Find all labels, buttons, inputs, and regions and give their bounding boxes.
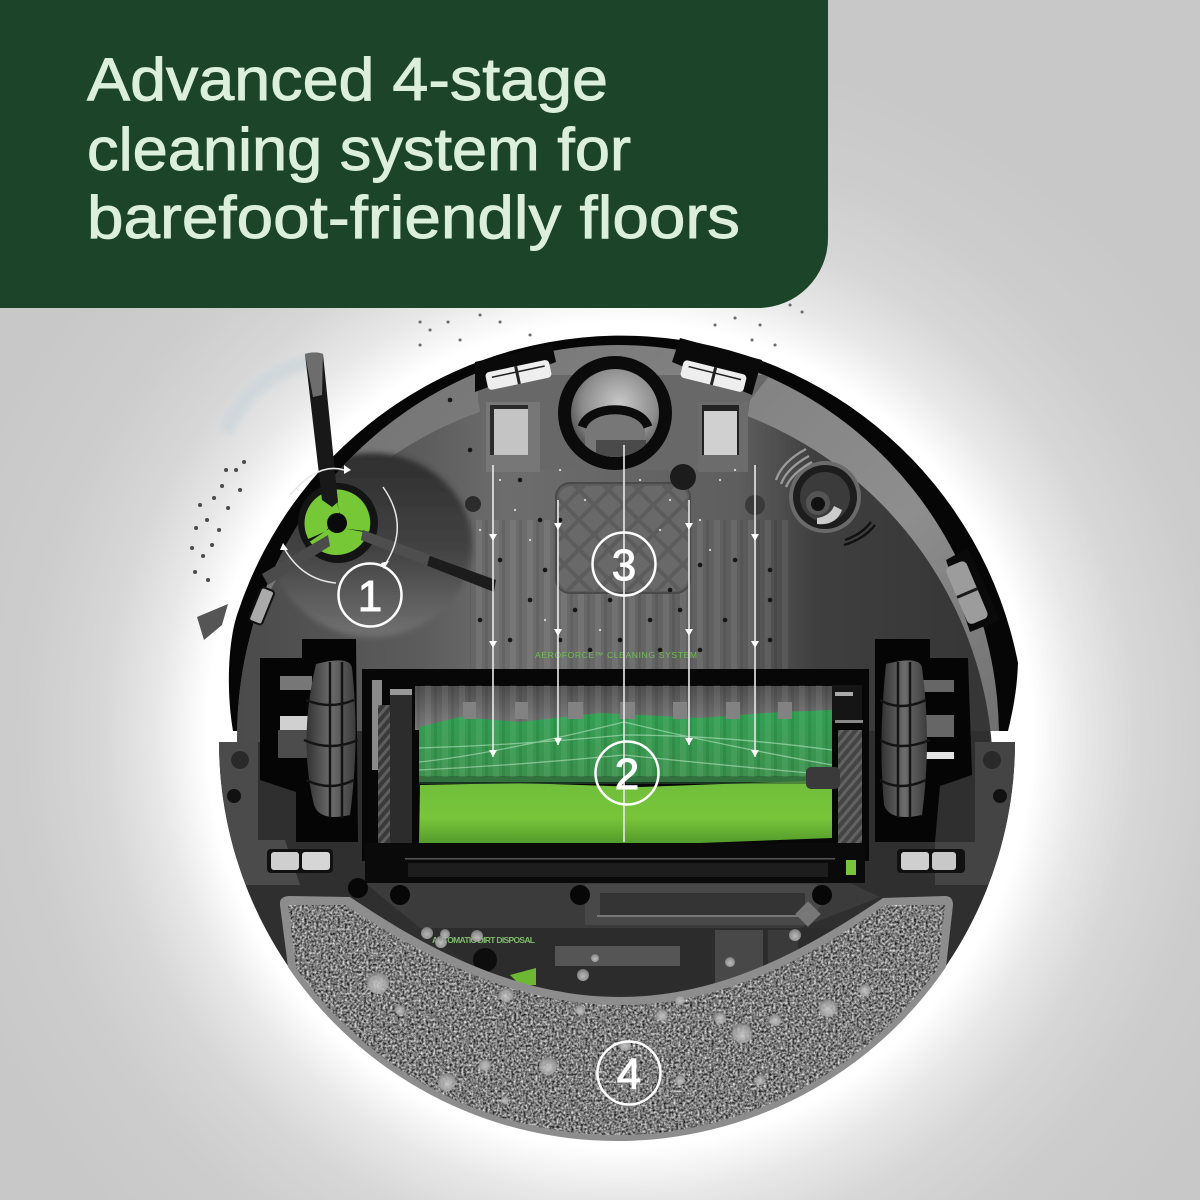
roller tabs	[463, 702, 792, 719]
title text: Advanced 4-stage	[87, 46, 608, 113]
water droplets	[367, 927, 871, 1104]
airflow arrowheads	[489, 523, 759, 757]
rear bumper bar	[348, 878, 880, 928]
right lower body panel	[935, 742, 1015, 885]
brush cage	[362, 669, 869, 861]
right wheel	[880, 660, 930, 818]
upper green roller	[419, 710, 832, 782]
brush arms	[305, 352, 338, 507]
left brush end cap	[372, 680, 412, 845]
light dust flecks	[480, 470, 735, 630]
camera sensor with signal arcs	[776, 449, 875, 545]
lower body	[219, 731, 1015, 1140]
roller shadow band	[419, 776, 832, 784]
translucent airflow over roller	[415, 686, 832, 730]
side brush motion swoosh	[226, 360, 312, 432]
top centre plate	[478, 375, 768, 413]
title text: barefoot-friendly floors	[87, 184, 740, 251]
diamond textured plate	[556, 483, 690, 593]
rotation arrows	[284, 468, 397, 583]
callout number 4: 4	[617, 1050, 641, 1099]
right sensor window	[698, 402, 748, 472]
callout number 2	[596, 742, 658, 804]
mop grain texture	[288, 905, 945, 1135]
title text: cleaning system for	[87, 116, 631, 183]
left wheel	[304, 660, 358, 818]
left bumper sensor lower	[267, 849, 333, 873]
title panel	[0, 0, 828, 308]
bottom compartment	[420, 928, 860, 995]
side brush shadow blob	[272, 453, 472, 637]
left cliff sensor	[248, 587, 275, 625]
small holes	[670, 464, 696, 490]
side brush	[197, 352, 496, 640]
right axle	[922, 680, 954, 759]
green indicator	[846, 860, 856, 875]
flying dust particles	[192, 305, 802, 580]
callout number 1	[338, 564, 402, 626]
left sensor window	[486, 402, 540, 472]
airflow arrow lines	[493, 445, 755, 842]
title text	[87, 46, 740, 251]
green brush hub	[306, 491, 369, 553]
callout number 3	[592, 532, 656, 596]
central dust over floor	[450, 400, 770, 650]
right brush end cap	[832, 685, 863, 855]
underside floor	[237, 375, 992, 742]
outer black rim	[229, 336, 1018, 731]
lighter inner ring	[237, 345, 999, 731]
body detail holes	[227, 751, 1007, 803]
robot vacuum underside	[197, 336, 1018, 1160]
top-left bumper sensor	[485, 359, 552, 390]
mop pad	[280, 896, 953, 1141]
left wheel well	[260, 639, 358, 842]
callout number 2: 2	[615, 750, 639, 799]
callout number 4	[598, 1042, 660, 1104]
caster wheel	[558, 356, 672, 470]
label: aeroforce cleaning system: AEROFORCE™ CLEANING SYSTEM	[535, 650, 697, 660]
right cliff sensor	[945, 548, 1000, 632]
right motor stub	[806, 767, 840, 789]
right wheel well	[875, 639, 972, 842]
top-right bumper sensor	[680, 360, 747, 393]
left axle	[278, 676, 312, 758]
lower brush bar	[365, 843, 865, 883]
roller crossing lines	[419, 722, 832, 775]
rim bumps	[475, 344, 556, 392]
right bumper sensor lower	[897, 849, 965, 873]
callout number 3: 3	[612, 541, 636, 590]
callout number 1: 1	[358, 572, 382, 621]
lower green roller	[419, 780, 832, 843]
left lower body panel	[219, 742, 300, 885]
airflow stripes	[470, 520, 790, 680]
stripes over roller	[415, 685, 832, 777]
label: automatic dirt disposal: AUTOMATIC DIRT DISPOSAL	[432, 935, 535, 945]
